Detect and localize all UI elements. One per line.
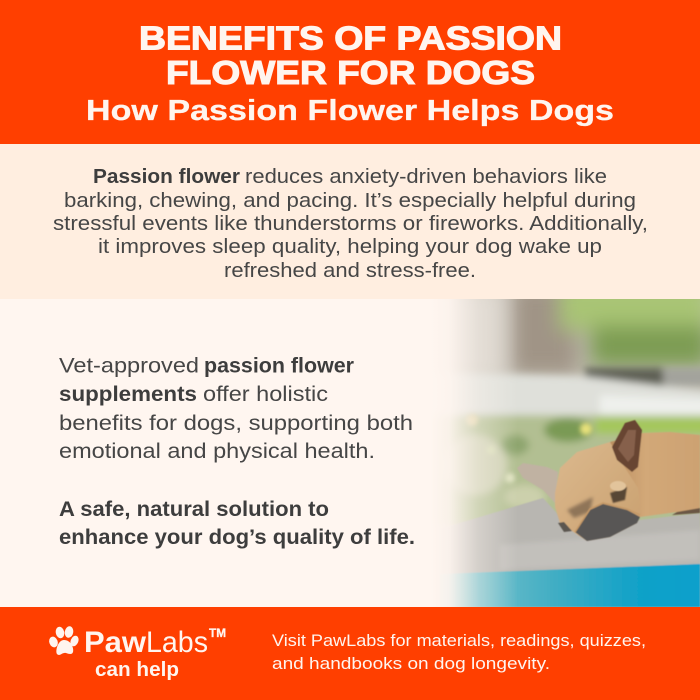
footer panel bbox=[0, 607, 700, 700]
header panel bbox=[0, 0, 700, 144]
title bbox=[139, 20, 562, 91]
supporting text: Vet-approved bbox=[59, 354, 199, 378]
supporting text: passion flower bbox=[204, 354, 355, 378]
intro paragraph: Passion flower bbox=[93, 165, 240, 188]
intro paragraph: reduces anxiety-driven behaviors like bbox=[245, 165, 607, 188]
subtitle: How Passion Flower Helps Dogs bbox=[86, 95, 614, 127]
bold conclusion: A safe, natural solution to bbox=[59, 497, 329, 521]
supporting text: benefits for dogs, supporting both bbox=[59, 411, 413, 435]
intro paragraph: it improves sleep quality, helping your dog wake up bbox=[98, 235, 602, 258]
logo wordmark: Labs bbox=[146, 626, 208, 659]
panel: intro text bbox=[0, 144, 700, 299]
intro paragraph: barking, chewing, and pacing. It’s especially helpful during bbox=[64, 189, 636, 212]
footer message: and handbooks on dog longevity. bbox=[272, 654, 550, 673]
bold conclusion bbox=[59, 497, 415, 549]
title: BENEFITS OF PASSION bbox=[139, 20, 562, 56]
dog bbox=[517, 420, 700, 541]
intro paragraph: stressful events like thunderstorms or fireworks. Additionally, bbox=[53, 212, 648, 235]
panel: main content bbox=[59, 299, 700, 607]
supporting text: supplements bbox=[59, 382, 197, 406]
icon: paw bbox=[48, 626, 80, 655]
logo wordmark: Paw bbox=[84, 626, 147, 659]
logo wordmark bbox=[84, 626, 226, 659]
title: FLOWER FOR DOGS bbox=[166, 54, 535, 91]
supporting text: emotional and physical health. bbox=[59, 439, 375, 463]
bold conclusion: enhance your dog’s quality of life. bbox=[59, 525, 415, 549]
intro paragraph: refreshed and stress-free. bbox=[224, 259, 476, 282]
intro paragraph bbox=[53, 165, 648, 282]
photo: sleeping dog on cushion bbox=[447, 299, 700, 607]
logo wordmark: TM bbox=[209, 628, 226, 640]
cushion bbox=[440, 498, 700, 607]
supporting text bbox=[59, 354, 413, 463]
footer message bbox=[272, 631, 646, 673]
footer message: Visit PawLabs for materials, readings, quizzes, bbox=[272, 631, 646, 650]
can help: can help bbox=[95, 659, 179, 681]
supporting text: offer holistic bbox=[203, 382, 328, 406]
